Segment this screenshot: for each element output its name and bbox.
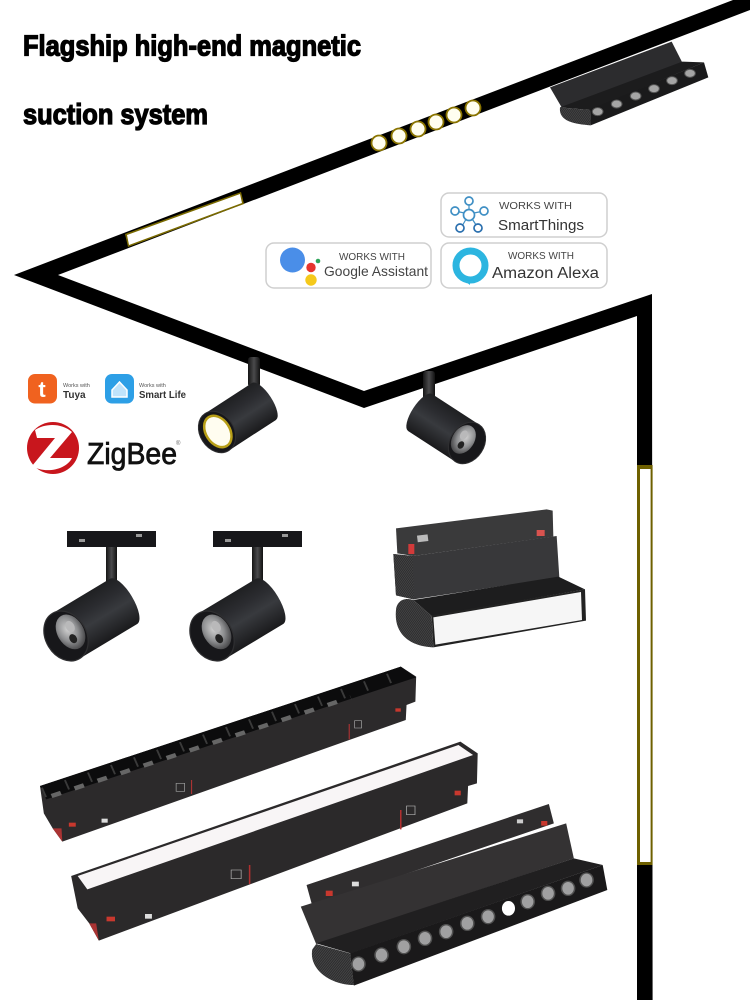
- badge: Tuya: t: [38, 377, 46, 402]
- title: suction system: [23, 99, 208, 131]
- badge: Tuya: Tuya: [63, 390, 86, 401]
- badge: works with Google Assistant: [266, 243, 431, 288]
- dot light row on upper track: [372, 100, 480, 150]
- title: Flagship high-end magnetic: [23, 30, 361, 62]
- folding floodlight module: [393, 509, 586, 647]
- badge: Smart Life: Works with: [139, 383, 166, 389]
- folding lens module on track: [550, 42, 708, 125]
- spotlight product: left: [35, 531, 156, 669]
- spotlight: lit on track: [191, 357, 283, 460]
- badge: works with SmartThings: WORKS WITH: [499, 200, 572, 212]
- icon: SmartThings network: [451, 197, 488, 232]
- badge: Tuya: [28, 374, 90, 404]
- badge: works with Google Assistant: WORKS WITH: [339, 251, 405, 263]
- spotlight: on track: [401, 371, 493, 471]
- logo: ZigBee: [27, 422, 181, 474]
- icon: house: [112, 382, 127, 397]
- badge: works with Google Assistant: Google Assistant: [324, 263, 428, 279]
- icon: Alexa ring: [456, 251, 485, 285]
- badge: works with Amazon Alexa: [441, 243, 607, 288]
- badge: works with Amazon Alexa: WORKS WITH: [508, 250, 574, 262]
- title: [23, 30, 361, 131]
- linear light on upper track: [125, 192, 244, 247]
- folding multi-lens bar: [301, 804, 607, 986]
- logo: ZigBee: ZigBee: [87, 436, 177, 471]
- spotlight product: right: [181, 531, 302, 669]
- vertical linear light: [637, 465, 653, 865]
- logo: ZigBee: ®: [176, 440, 181, 447]
- badge: Smart Life: [105, 374, 186, 404]
- badge: works with SmartThings: [441, 193, 607, 237]
- badge: works with SmartThings: SmartThings: [498, 217, 584, 234]
- badge: works with Amazon Alexa: Amazon Alexa: [492, 265, 599, 282]
- badge: Smart Life: Smart Life: [139, 390, 186, 401]
- linear lens bar: [40, 667, 416, 842]
- linear opal bar: [71, 742, 478, 941]
- badge: Tuya: Works with: [63, 383, 90, 389]
- icon: Google Assistant dots: [280, 248, 320, 286]
